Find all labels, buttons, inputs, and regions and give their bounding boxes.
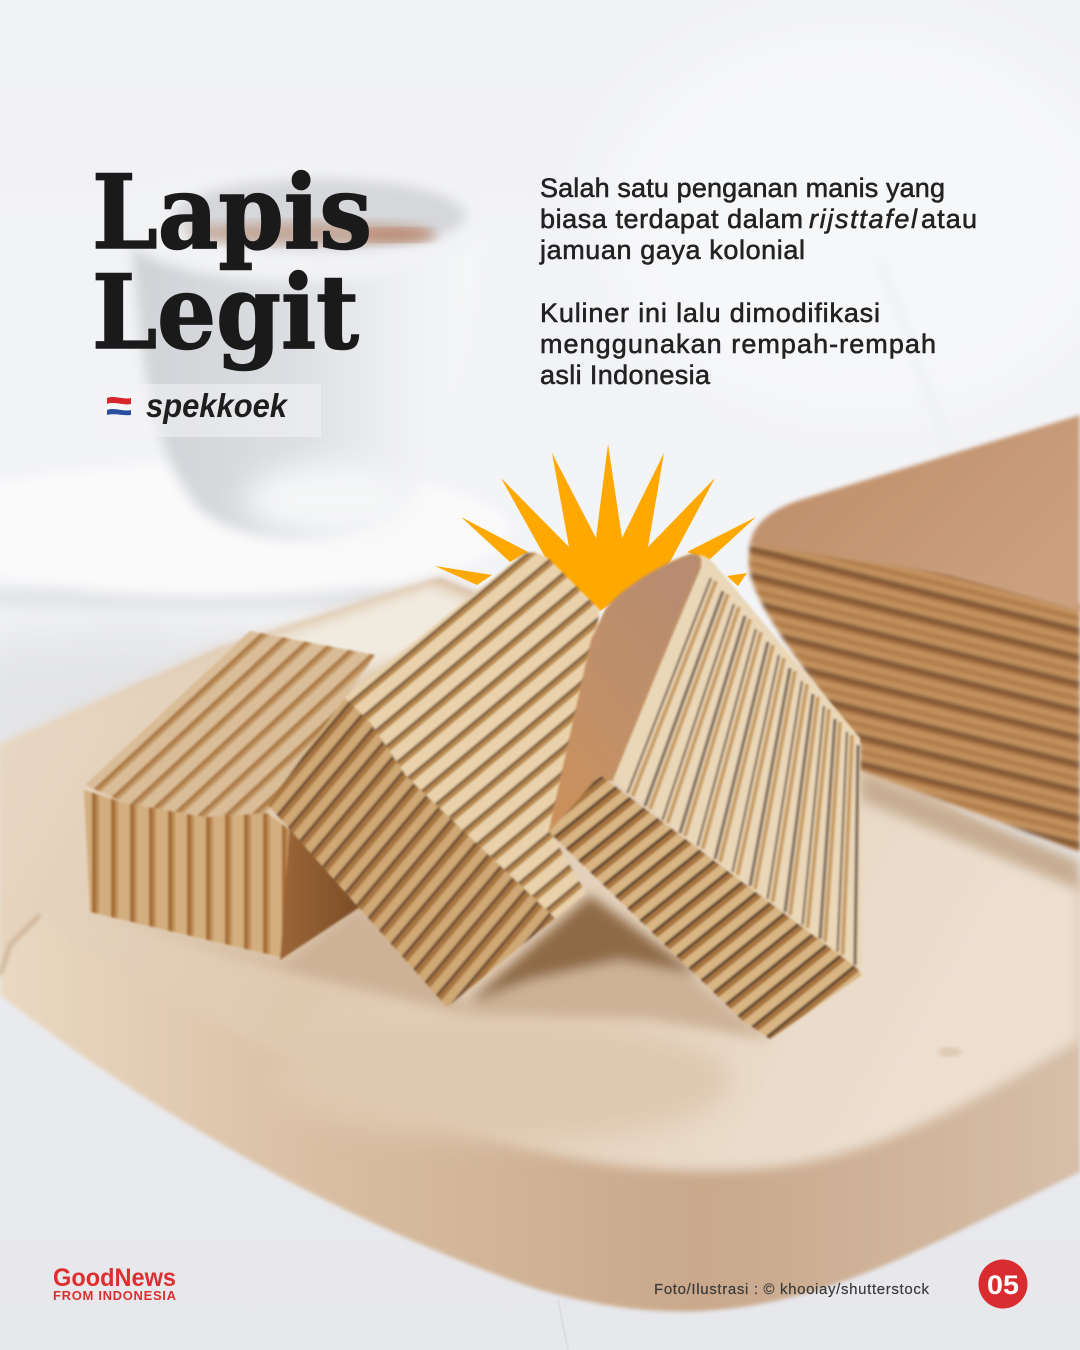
cutting board [0, 578, 1080, 1311]
icon: dutch flag [107, 397, 131, 415]
description text: Kuliner ini lalu dimodifikasi [540, 298, 880, 328]
saucer [0, 464, 510, 610]
plank gap [558, 1300, 568, 1350]
description text: jamuan gaya kolonial [539, 235, 805, 265]
sun burst [435, 444, 756, 611]
description text [539, 173, 977, 390]
logo: GoodNews from Indonesia: GoodNews [53, 1264, 176, 1292]
page number badge [978, 1260, 1028, 1308]
page number badge: 05 [987, 1270, 1019, 1300]
title: Lapis [92, 153, 372, 273]
logo: GoodNews from Indonesia: FROM INDONESIA [53, 1288, 177, 1303]
whole lapis cake, right [749, 415, 1080, 852]
dutch name label [95, 384, 321, 437]
title: Legit [92, 253, 359, 373]
middle slice [268, 553, 600, 1007]
description text: asli Indonesia [540, 360, 711, 390]
description text: Salah satu penganan manis yang [540, 173, 945, 203]
right slice [549, 555, 862, 1039]
description text: rijsttafel [809, 204, 918, 234]
dutch name label: spekkoek [146, 387, 289, 424]
description text: atau [921, 204, 977, 234]
photo credit: Foto/Ilustrasi : © khooiay/shutterstock [654, 1281, 930, 1298]
cup [115, 162, 485, 539]
description text: biasa terdapat dalam [540, 204, 803, 234]
shadows under cakes [90, 770, 1080, 1040]
left slice [84, 631, 375, 960]
logo: GoodNews from Indonesia [53, 1264, 177, 1303]
title [92, 153, 372, 373]
description text: menggunakan rempah-rempah [540, 329, 936, 359]
